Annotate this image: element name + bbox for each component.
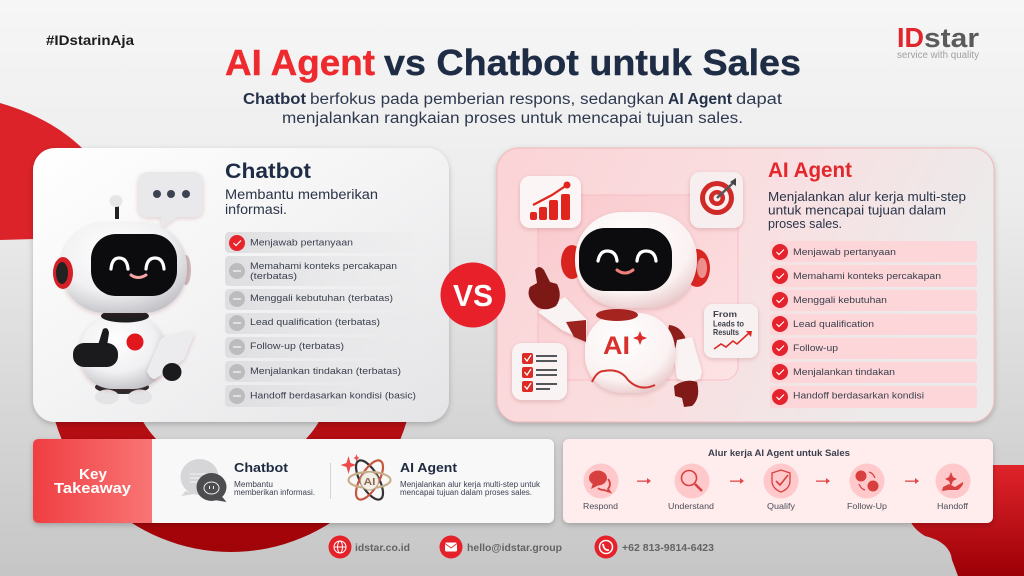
text: ai agent takeaway — [400, 460, 540, 497]
key takeaway label — [33, 439, 152, 523]
icon: chart tile — [520, 176, 581, 228]
step: follow-up: Follow-Up — [847, 501, 887, 511]
robot: ai agent — [529, 212, 710, 408]
footer: website — [328, 536, 410, 558]
feature list: ai agent — [770, 241, 977, 408]
logo: IDstar: ID — [897, 22, 924, 53]
description: ai agent: Menjalankan alur kerja multi-step — [768, 189, 966, 204]
description: chatbot: informasi. — [225, 202, 287, 217]
callout: from leads to results: Results — [713, 327, 739, 337]
callout: from leads to results: From — [713, 309, 737, 319]
decorative red shape: top left — [0, 103, 86, 240]
text: ai agent takeaway: AI Agent — [400, 460, 458, 475]
feature list: ai agent: Menjawab pertanyaan — [793, 247, 896, 258]
icon: checklist tile — [512, 343, 567, 400]
subtitle: dapat — [736, 91, 783, 108]
step: handoff: Handoff — [937, 501, 969, 511]
panel: chatbot — [33, 148, 449, 422]
arrow — [637, 478, 651, 484]
workflow heading: Alur kerja AI Agent untuk Sales — [708, 448, 850, 459]
feature list: chatbot: Handoff berdasarkan kondisi (basic) — [250, 390, 416, 402]
feature list: ai agent: Menggali kebutuhan — [793, 295, 887, 306]
text: chatbot takeaway: Membantu — [234, 480, 273, 489]
subtitle: menjalankan rangkaian proses untuk mencapai tujuan sales. — [282, 110, 743, 127]
footer: email: hello@idstar.group — [467, 542, 562, 554]
panel: key takeaway — [33, 439, 554, 523]
heading: ai agent: AI Agent — [768, 159, 852, 182]
arrow — [730, 478, 744, 484]
heading: chatbot: Chatbot — [225, 160, 311, 183]
callout: from leads to results: Leads to — [713, 318, 744, 328]
decorative red ring: bottom left — [48, 185, 414, 552]
panel: workflow — [563, 439, 993, 523]
description: chatbot: Membantu memberikan — [225, 187, 378, 202]
icon: target tile — [690, 172, 743, 228]
description: ai agent: proses sales. — [768, 216, 842, 231]
text: chatbot takeaway — [234, 460, 315, 497]
footer: email — [440, 536, 562, 558]
footer: phone: +62 813-9814-6423 — [622, 542, 714, 554]
step: understand — [668, 464, 714, 511]
footer: website: idstar.co.id — [355, 542, 410, 554]
step: qualify — [764, 464, 798, 511]
feature list: chatbot: Follow-up (terbatas) — [250, 341, 344, 352]
footer: phone — [594, 536, 714, 558]
title: AI Agent — [225, 42, 375, 83]
callout: from leads to results — [704, 304, 758, 358]
text: chatbot takeaway: Chatbot — [234, 460, 289, 475]
icon: ai atom: AI — [364, 477, 376, 488]
title: vs Chatbot untuk Sales — [384, 42, 801, 83]
step: respond — [583, 464, 618, 511]
arrow — [816, 478, 830, 484]
speech bubble with dots — [138, 172, 203, 227]
icon: ai atom — [340, 454, 390, 504]
subtitle: berfokus pada pemberian respons, sedangkan — [310, 91, 664, 108]
text on robot chest: AI — [603, 332, 630, 360]
feature list: ai agent: Lead qualification — [793, 319, 874, 330]
feature list: chatbot: Menjalankan tindakan (terbatas) — [250, 366, 401, 377]
feature list: chatbot — [225, 232, 416, 407]
step: qualify: Qualify — [767, 501, 796, 511]
feature list: ai agent: Menjalankan tindakan — [793, 367, 895, 378]
description: ai agent — [768, 189, 966, 231]
step: respond: Respond — [583, 501, 618, 511]
icon: chatbot bubbles — [180, 459, 226, 502]
step: handoff — [936, 464, 970, 511]
logo: IDstar — [897, 22, 980, 61]
step: follow-up — [847, 464, 887, 511]
text: chatbot takeaway: memberikan informasi. — [234, 488, 315, 497]
logo: IDstar: service with quality — [897, 50, 979, 61]
panel: ai agent — [497, 148, 994, 422]
logo: IDstar: star — [924, 23, 980, 53]
description: ai agent: untuk mencapai tujuan dalam — [768, 202, 946, 218]
feature list: chatbot: (terbatas) — [250, 271, 297, 282]
decorative red shape: bottom right — [908, 465, 1024, 576]
subtitle: AI Agent — [668, 91, 732, 108]
feature list: ai agent: Memahami konteks percakapan — [793, 271, 941, 282]
title — [225, 42, 801, 83]
text: ai agent takeaway: Menjalankan alur kerja multi-step untuk — [400, 480, 540, 489]
subtitle: Chatbot — [243, 91, 306, 108]
text: ai agent takeaway: mencapai tujuan dalam proses sales. — [400, 488, 532, 497]
key takeaway label: Key — [79, 466, 108, 483]
description: chatbot — [225, 187, 378, 217]
robot: chatbot — [53, 172, 203, 404]
vs badge — [440, 262, 506, 328]
feature list: chatbot: Menggali kebutuhan (terbatas) — [250, 293, 393, 304]
feature list: chatbot: Lead qualification (terbatas) — [250, 317, 380, 328]
feature list: ai agent: Handoff berdasarkan kondisi — [793, 390, 924, 402]
arrow — [905, 478, 919, 484]
key takeaway label: Takeaway — [54, 480, 132, 497]
vs badge: VS — [453, 278, 493, 313]
hashtag: #IDstarinAja — [46, 32, 134, 48]
step: understand: Understand — [668, 501, 714, 511]
subtitle — [243, 91, 783, 127]
feature list: chatbot: Memahami konteks percakapan — [250, 261, 397, 272]
feature list: chatbot: Menjawab pertanyaan — [250, 238, 353, 248]
feature list: ai agent: Follow-up — [793, 343, 838, 354]
